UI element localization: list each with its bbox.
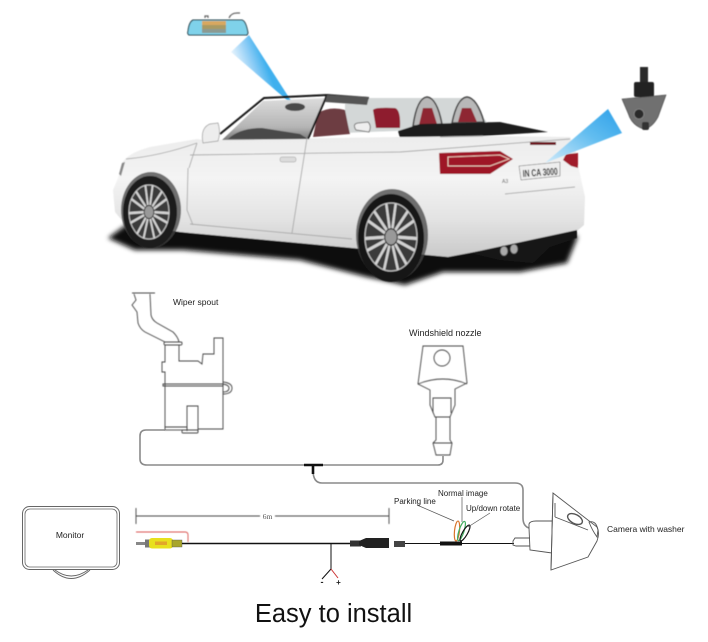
label: parking line: Parking line [394, 497, 436, 506]
body crease lines [126, 136, 575, 239]
washer hoses [140, 430, 529, 528]
dashboard mirror mount [285, 103, 305, 111]
label: camera with washer: Camera with washer [607, 524, 685, 534]
coloured wire loops [440, 521, 472, 546]
monitor: Monitor [56, 530, 84, 540]
label: up/down rotate: Up/down rotate [466, 504, 521, 513]
power leads: + [336, 578, 341, 587]
license plate: IN CA 3000 [522, 167, 558, 180]
camera cable [405, 542, 514, 544]
rearview mirror monitor [188, 13, 248, 35]
cable connector [350, 538, 405, 548]
T connector [304, 465, 323, 474]
blue view cone: mirror [231, 35, 295, 107]
convertible tonneau cover [398, 122, 548, 138]
rear camera drawing [513, 493, 598, 570]
main video cable [182, 542, 352, 544]
model badge: A3 [502, 179, 508, 185]
wire leader lines [417, 497, 490, 527]
monitor [22, 506, 120, 578]
cable length label: 6m [263, 512, 272, 521]
front wheel [121, 172, 181, 248]
rear frame infill [325, 95, 369, 105]
blue view cone: rear camera [545, 109, 622, 163]
side mirror [202, 123, 220, 143]
label: wiper spout: Wiper spout [173, 297, 219, 307]
red power loop [136, 532, 188, 542]
RCA video plug [136, 538, 182, 548]
right tail light [563, 153, 578, 168]
rear bumper diffuser and exhaust [470, 230, 577, 263]
car ground shadow [108, 222, 578, 285]
left tail light [439, 151, 513, 174]
diagram lines and hoses [132, 293, 467, 542]
power leads [320, 543, 341, 587]
power leads: - [320, 577, 324, 587]
dimension line [136, 508, 389, 524]
front seat [313, 109, 350, 137]
windshield and side window [222, 98, 326, 140]
headlight [119, 162, 125, 176]
high mounted brake light [530, 142, 556, 145]
caption: Easy to install [255, 600, 412, 628]
rear seats and roll bars [345, 97, 490, 133]
door handle [280, 157, 296, 162]
label: normal image: Normal image [438, 489, 488, 498]
wiper spout and washer tank [132, 293, 232, 433]
car body [113, 136, 585, 257]
label: windshield nozzle: Windshield nozzle [409, 328, 482, 338]
dashboard [228, 128, 308, 139]
rear camera photo [622, 67, 666, 130]
rear wheel [356, 189, 428, 282]
license plate [519, 162, 560, 180]
windshield nozzle [418, 346, 467, 455]
car illustration [108, 95, 585, 285]
window frame [220, 95, 369, 139]
